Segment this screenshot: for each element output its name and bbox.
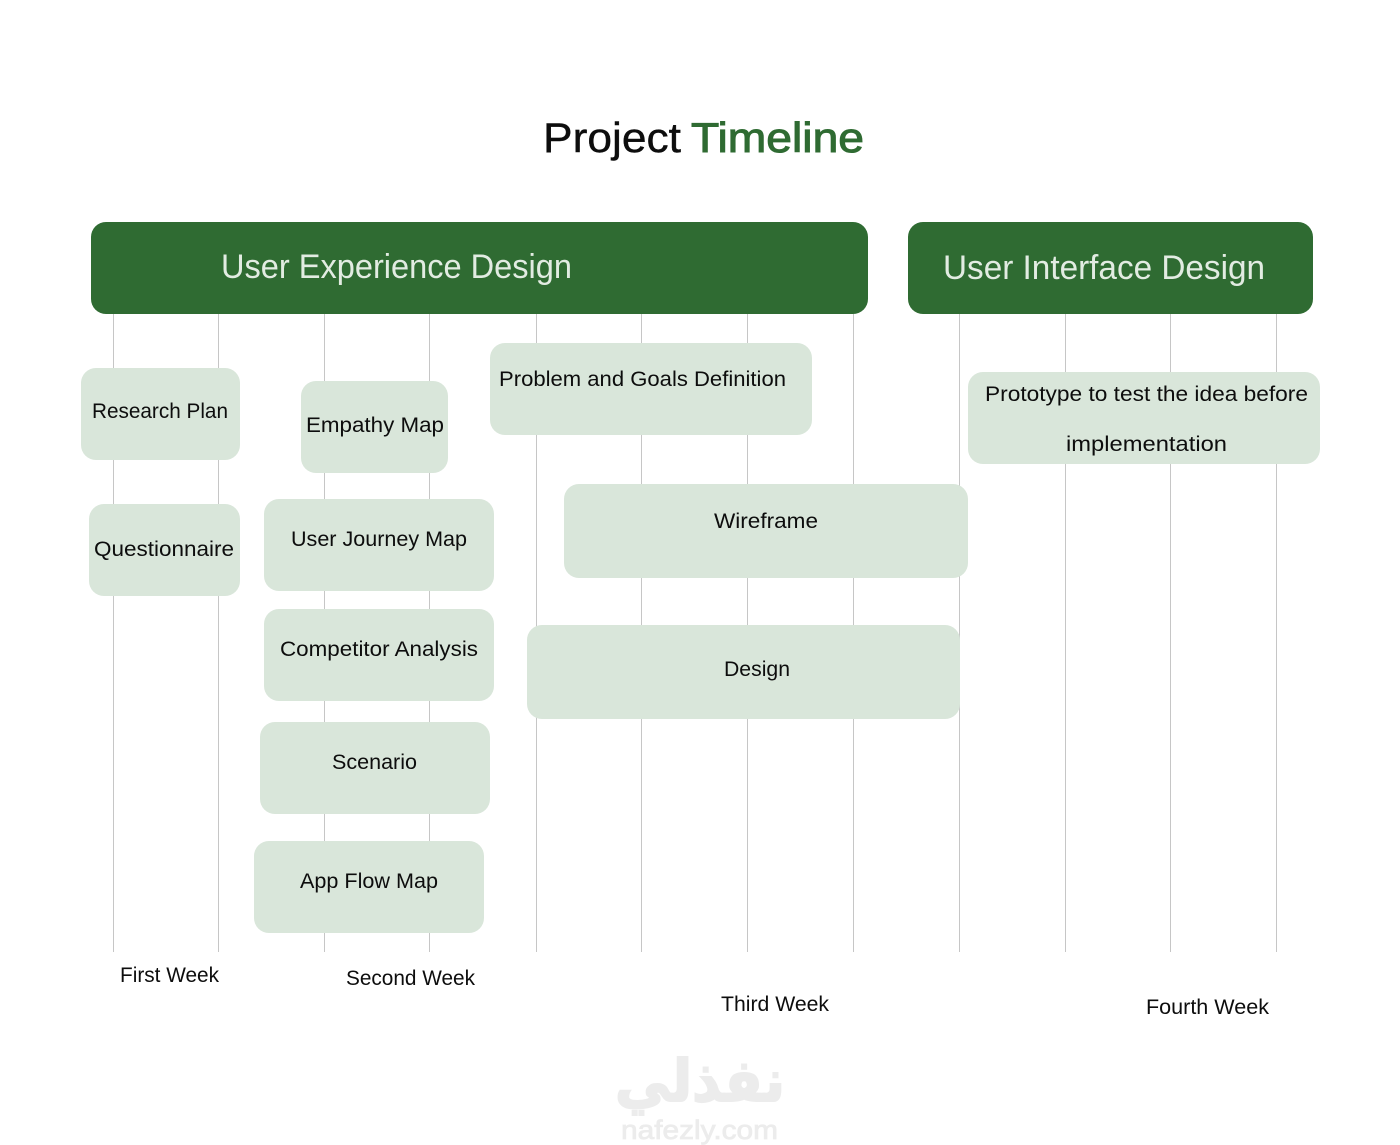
task: design — [527, 625, 960, 719]
label: fourth week: Fourth Week — [1146, 996, 1270, 1019]
panel: user interface design header: User Interface Design — [943, 249, 1265, 287]
task: app flow map — [254, 841, 484, 933]
task: prototype — [968, 372, 1320, 464]
task: research plan: Research Plan — [92, 400, 228, 423]
task: prototype: implementation — [1066, 433, 1227, 456]
task: empathy map: Empathy Map — [306, 414, 444, 437]
task: scenario — [260, 722, 490, 814]
panel: user interface design header — [908, 222, 1313, 314]
task: empathy map — [301, 381, 448, 473]
task: wireframe — [564, 484, 968, 578]
title: Project — [543, 114, 681, 161]
task: design: Design — [724, 658, 790, 681]
watermark: نفذلي — [615, 1047, 785, 1115]
label: third week: Third Week — [721, 993, 829, 1016]
task: wireframe: Wireframe — [714, 510, 818, 533]
task: questionnaire: Questionnaire — [94, 538, 234, 561]
task: problem and goals definition: Problem and Goals Definition — [499, 368, 786, 391]
task: problem and goals definition — [490, 343, 812, 435]
task: user journey map — [264, 499, 494, 591]
watermark — [615, 1047, 785, 1145]
label: second week: Second Week — [346, 967, 475, 990]
watermark: nafezly.com — [621, 1115, 778, 1145]
panel: user experience design header — [91, 222, 868, 314]
task: competitor analysis: Competitor Analysis — [280, 638, 478, 661]
panel: user experience design header: User Experience Design — [221, 248, 572, 286]
title — [543, 114, 864, 161]
task: user journey map: User Journey Map — [291, 528, 467, 551]
task: research plan — [81, 368, 240, 460]
task: competitor analysis — [264, 609, 494, 701]
title: Timeline — [691, 114, 864, 161]
task: scenario: Scenario — [332, 751, 417, 774]
task: app flow map: App Flow Map — [300, 870, 438, 893]
task: questionnaire — [89, 504, 240, 596]
label: first week: First Week — [120, 964, 219, 987]
task: prototype: Prototype to test the idea before — [985, 383, 1308, 406]
